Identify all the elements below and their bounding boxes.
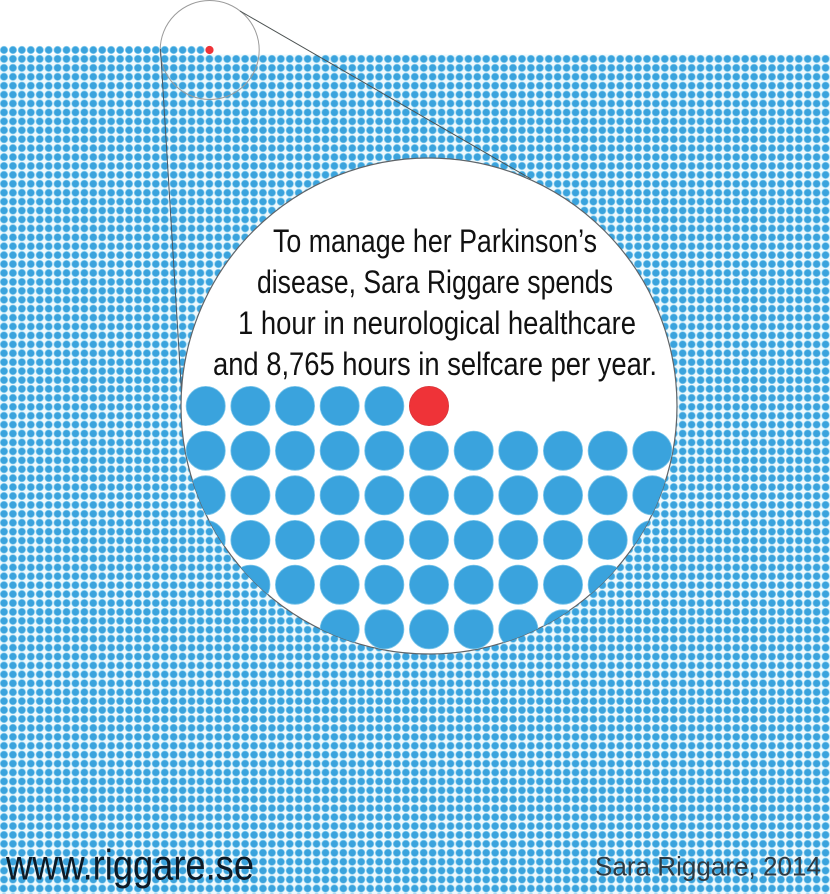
- magnified red dot: [409, 386, 449, 426]
- large magnified circle: [181, 158, 677, 654]
- magnified dots: [186, 386, 672, 649]
- small magnifier circle: [160, 0, 259, 100]
- zoom line left: [160, 49, 182, 400]
- red dot: hour in neurological healthcare: [205, 46, 214, 54]
- zoom line right: [240, 11, 531, 179]
- main statement text: To manage her Parkinson’s: [273, 223, 597, 259]
- website link: www.riggare.se: [5, 842, 254, 890]
- main statement text: disease, Sara Riggare spends: [257, 264, 613, 300]
- main statement text: [213, 223, 657, 382]
- main statement text: and 8,765 hours in selfcare per year.: [213, 346, 657, 382]
- author credit: Sara Riggare, 2014: [595, 852, 821, 882]
- main statement text: 1 hour in neurological healthcare: [238, 305, 636, 341]
